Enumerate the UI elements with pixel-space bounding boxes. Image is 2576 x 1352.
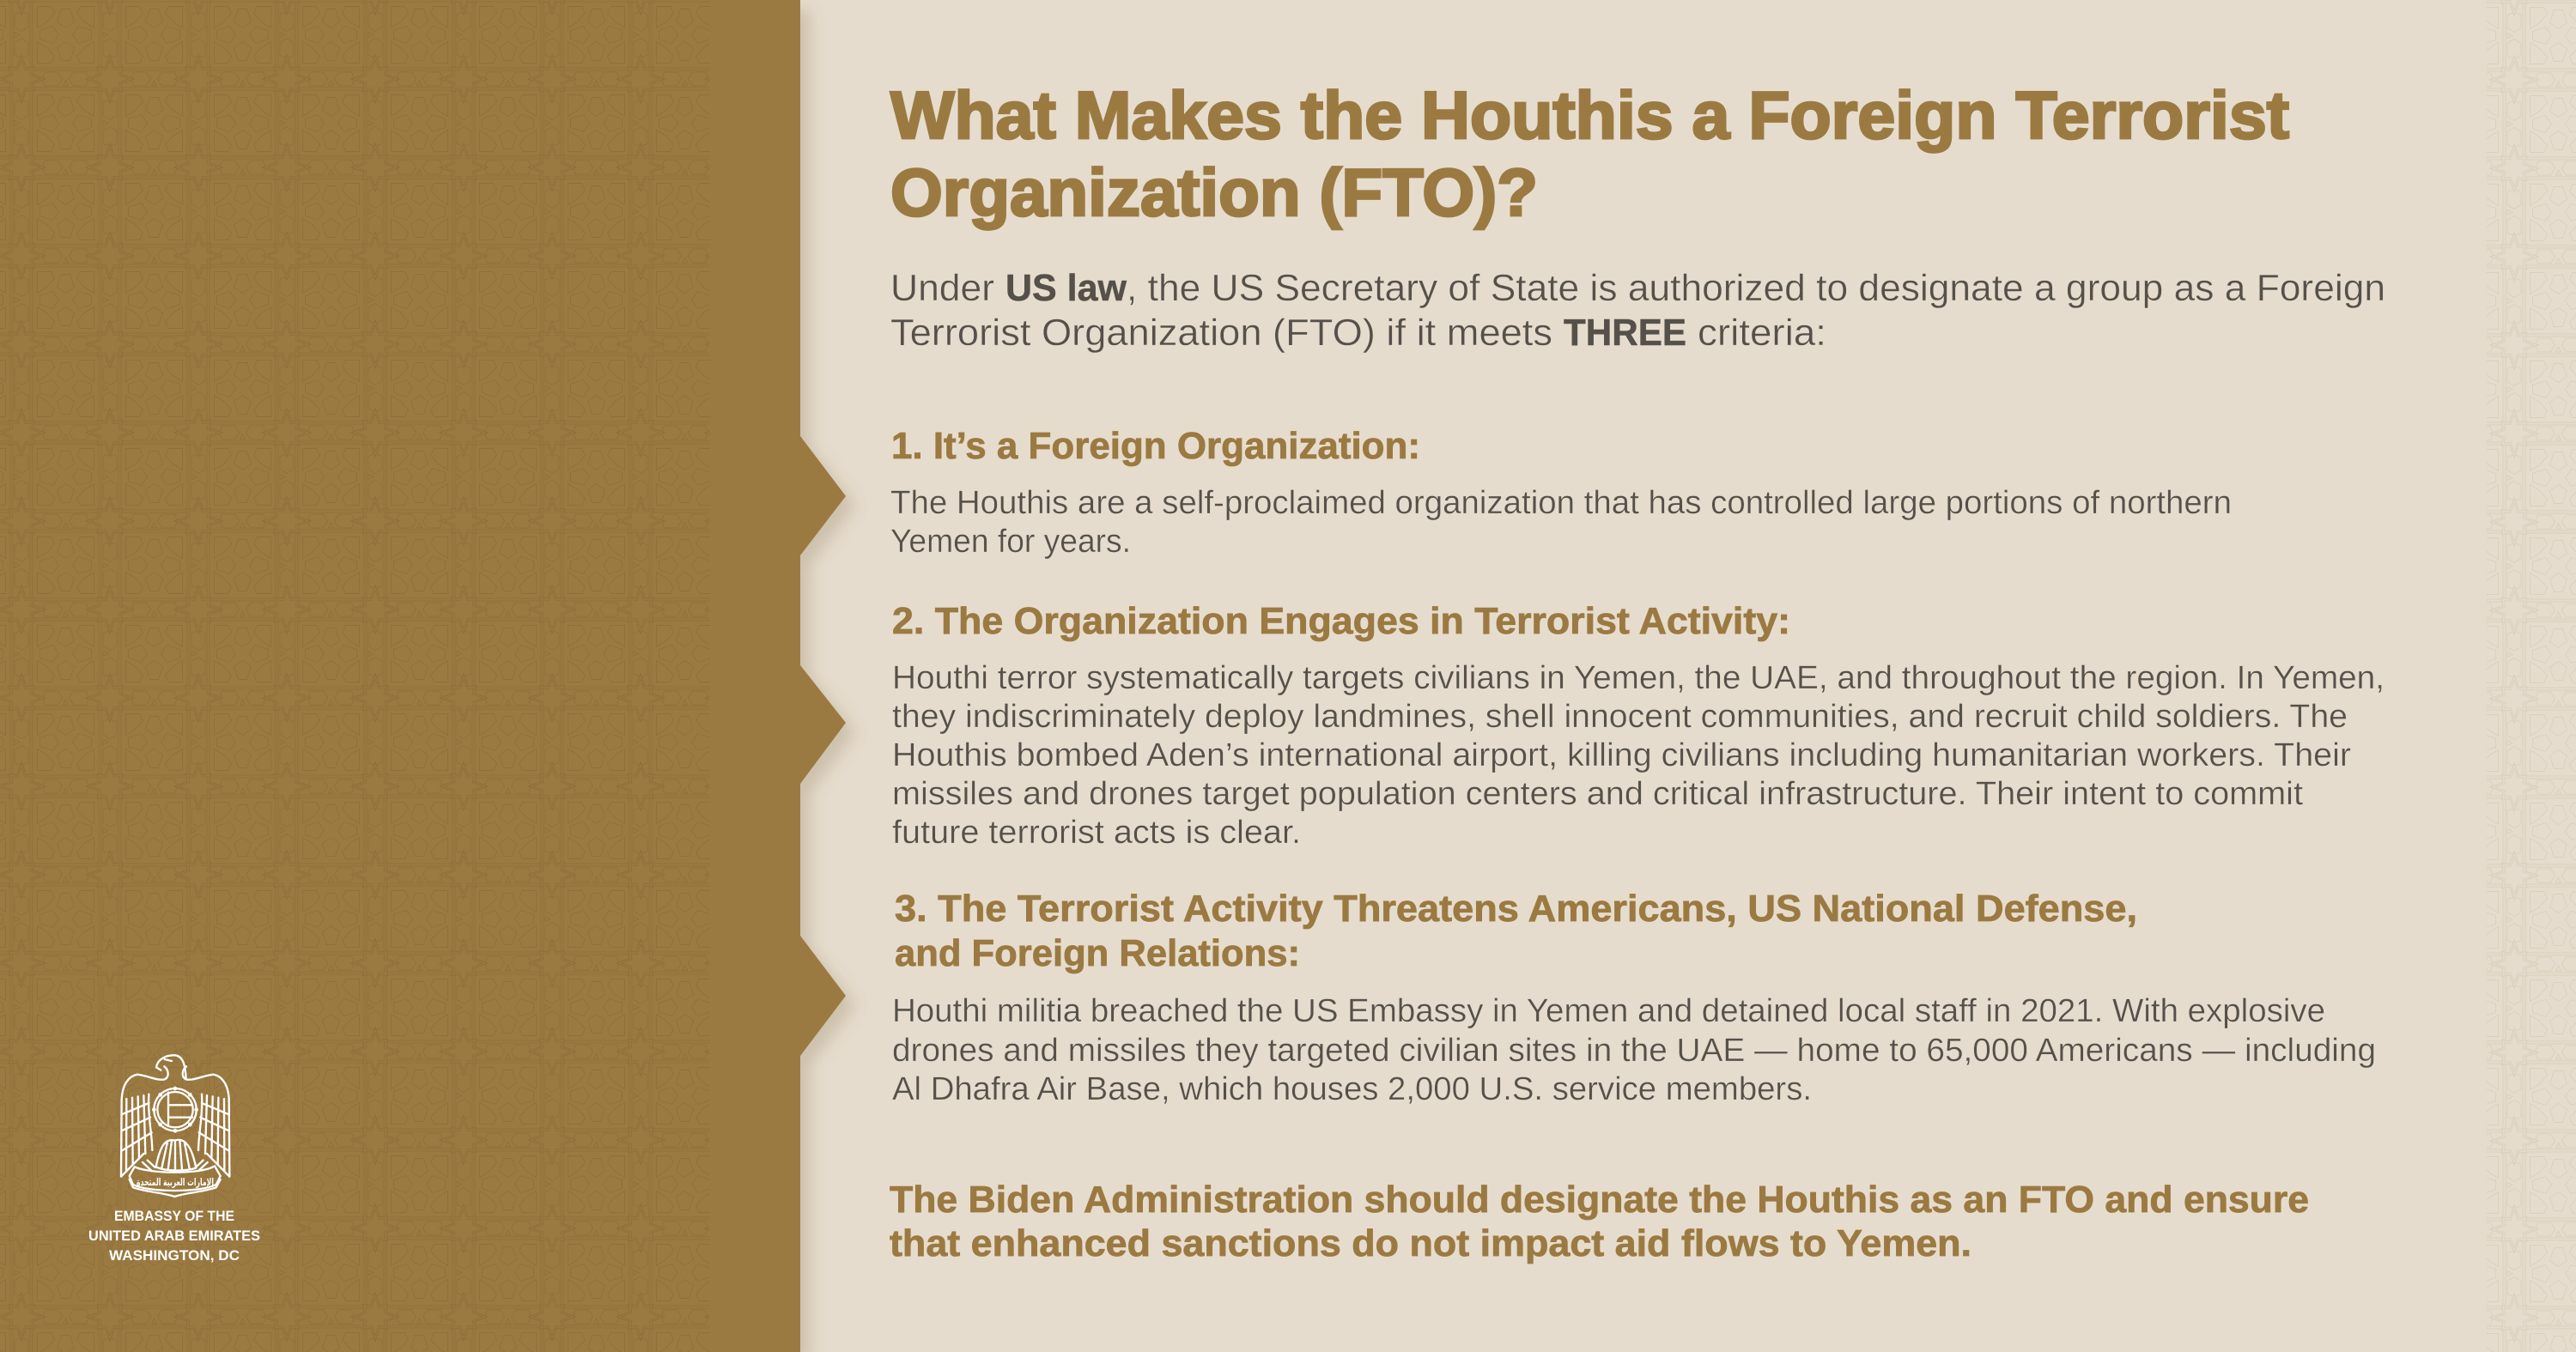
intro text: , the US Secretary of State is authorized to designate a group as a Foreign xyxy=(1127,267,2385,309)
heading: criterion 3: and Foreign Relations: xyxy=(895,932,1300,974)
closing call to action xyxy=(890,1179,2309,1264)
embassy name: UNITED ARAB EMIRATES xyxy=(88,1228,260,1244)
closing call to action: The Biden Administration should designate the Houthis as an FTO and ensure xyxy=(890,1179,2309,1221)
body: criterion 2: they indiscriminately deploy landmines, shell innocent communities, and recruit child soldiers. The xyxy=(892,699,2348,735)
body: criterion 1: Yemen for years. xyxy=(890,524,1131,560)
embassy name: EMBASSY OF THE xyxy=(114,1209,234,1224)
body: criterion 3: drones and missiles they targeted civilian sites in the UAE — home to 65,000 Americans — including xyxy=(892,1033,2376,1069)
heading: criterion 1: 1. It’s a Foreign Organization: xyxy=(891,425,1420,467)
title xyxy=(890,77,2289,230)
body: criterion 3: Al Dhafra Air Base, which houses 2,000 U.S. service members. xyxy=(892,1071,1812,1107)
body: criterion 3 xyxy=(892,993,2376,1107)
heading: criterion 2: 2. The Organization Engages in Terrorist Activity: xyxy=(892,600,1790,642)
body: criterion 3: Houthi militia breached the US Embassy in Yemen and detained local staff in 2021. With explosive xyxy=(892,993,2325,1029)
heading: criterion 3: 3. The Terrorist Activity Threatens Americans, US National Defense, xyxy=(895,888,2137,930)
intro text: Under xyxy=(890,267,994,309)
body: criterion 1 xyxy=(890,485,2232,560)
title: Organization (FTO)? xyxy=(890,155,1538,230)
criterion 3 xyxy=(892,888,2376,1107)
emblem scroll text: الإمارات العربية المتحدة xyxy=(137,1176,214,1188)
body: criterion 2 xyxy=(892,660,2385,851)
body: criterion 2: future terrorist acts is clear. xyxy=(892,815,1301,851)
intro text: Terrorist Organization (FTO) if it meets xyxy=(890,312,1552,354)
heading: criterion 3 xyxy=(895,888,2137,974)
closing call to action: that enhanced sanctions do not impact aid flows to Yemen. xyxy=(890,1222,1971,1264)
intro text: criteria: xyxy=(1698,312,1826,354)
logo: UAE emblem with embassy name xyxy=(88,1055,260,1264)
decorative pattern strip: right edge xyxy=(2487,0,2576,1352)
intro text xyxy=(890,267,2385,354)
body: criterion 2: missiles and drones target population centers and critical infrastructure. Their intent to commit xyxy=(892,776,2303,812)
body: criterion 2: Houthis bombed Aden’s international airport, killing civilians including humanitarian workers. Their xyxy=(892,737,2351,773)
panel: brown sidebar with three chevrons xyxy=(0,0,846,1352)
embassy name xyxy=(88,1209,260,1264)
criterion 1 xyxy=(890,425,2232,560)
intro text: US law xyxy=(1005,267,1127,309)
embassy name: WASHINGTON, DC xyxy=(109,1248,240,1264)
body: criterion 1: The Houthis are a self-proclaimed organization that has controlled large portions of northern xyxy=(890,485,2232,521)
intro text: THREE xyxy=(1564,312,1686,354)
title: What Makes the Houthis a Foreign Terrorist xyxy=(890,77,2289,153)
criterion 2 xyxy=(892,600,2385,851)
icon: UAE falcon emblem xyxy=(121,1055,229,1197)
body: criterion 2: Houthi terror systematically targets civilians in Yemen, the UAE, and throughout the region. In Yemen, xyxy=(892,660,2385,696)
